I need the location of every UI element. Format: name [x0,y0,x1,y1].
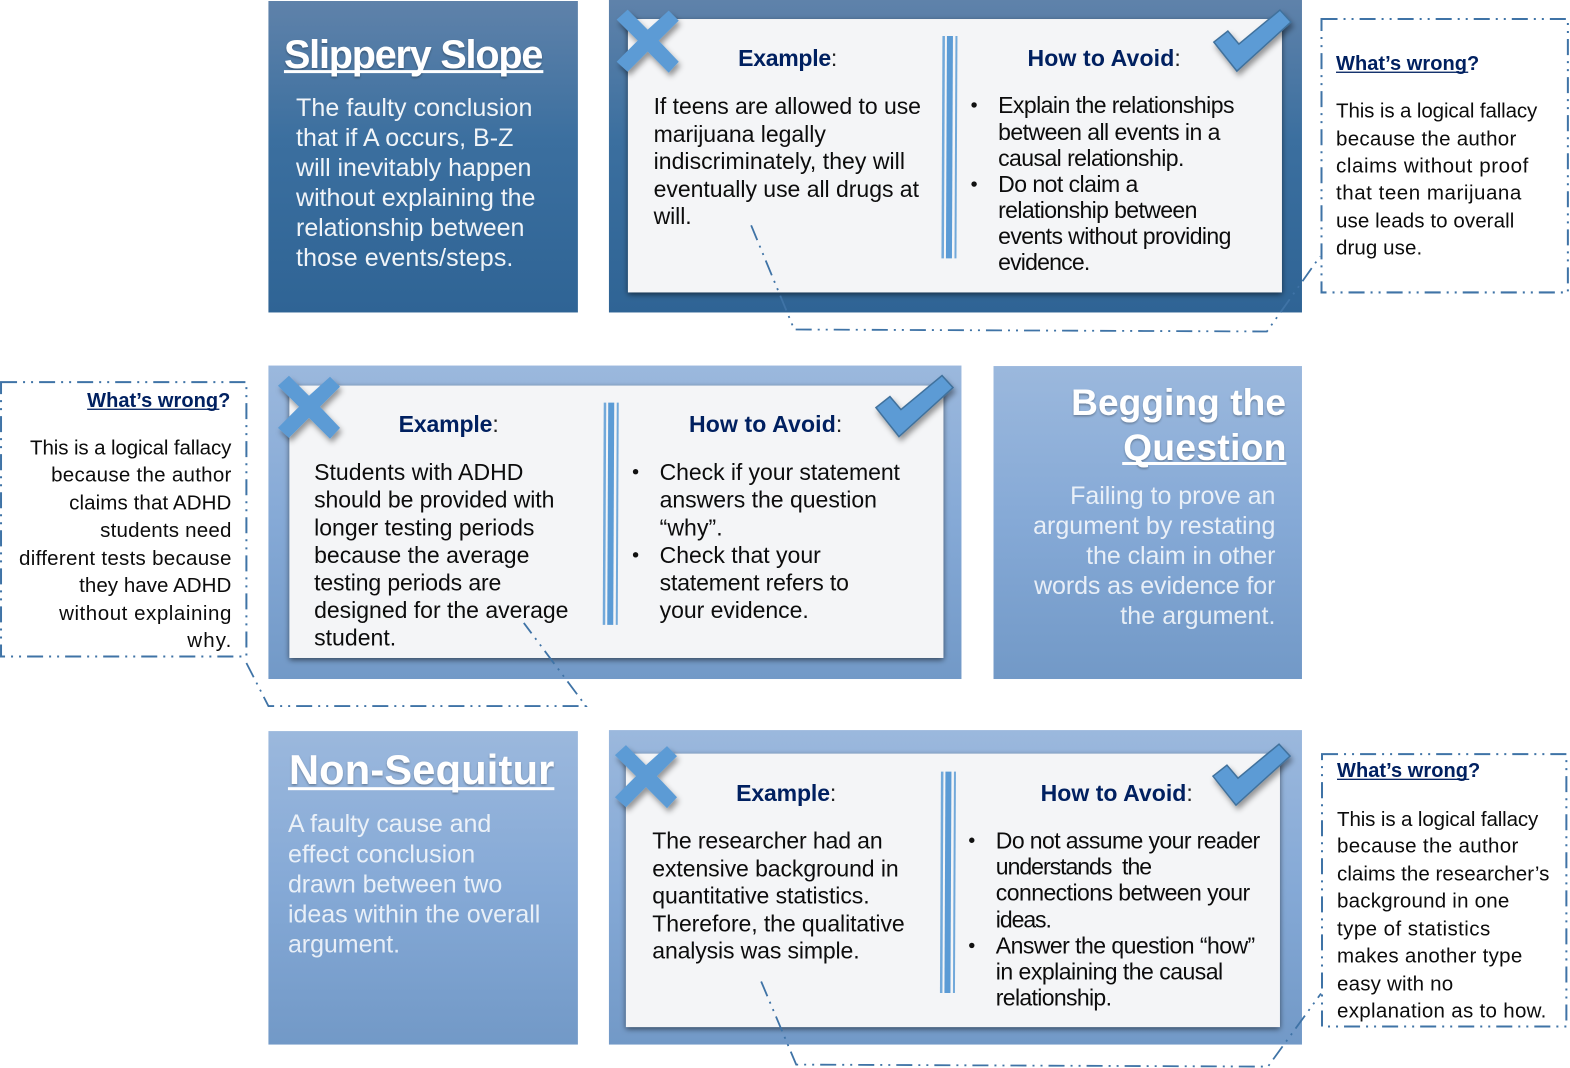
definition text: Non-Sequitur [288,810,540,958]
definition text: Begging the Question: argument by restating [1033,512,1275,540]
callout text: type of statistics [1337,917,1490,940]
how to avoid list: statement refers to [660,569,849,595]
example text [652,827,905,963]
definition text: Begging the Question: the claim in other [1086,542,1275,570]
callout text: that teen marijuana [1336,182,1522,205]
definition text: Non-Sequitur: argument. [288,930,400,958]
callout text: they have ADHD [79,574,231,597]
callout text [1336,99,1538,260]
callout heading: What’s wrong? [1337,760,1480,782]
heading: Slippery Slope: Slippery Slope [284,33,543,77]
definition text: Begging the Question [1033,482,1275,630]
how to avoid list: “why”. [660,514,723,540]
icon: cross mark [617,10,679,73]
how to avoid list: causal relationship. [998,145,1184,171]
divider: triple vertical bars [940,772,956,993]
heading: Example: Example: [738,45,837,71]
example text: extensive background in [652,855,899,881]
callout text: without explaining [58,602,231,625]
callout text: claims that ADHD [69,492,231,515]
callout connector line [246,623,586,706]
callout text: because the author [1337,834,1518,857]
example text: indiscriminately, they will [654,148,905,174]
example text [314,459,568,650]
how to avoid list: events without providing [998,223,1231,249]
example text: Students with ADHD [314,459,523,485]
how to avoid list: Answer the question “how” [996,932,1255,958]
how to avoid list [971,92,1234,275]
example text: because the average [314,542,529,568]
callout: What's wrong (Slippery Slope) [751,19,1568,331]
how to avoid list: understands the [996,853,1152,879]
callout text: explanation as to how. [1337,1000,1546,1023]
heading: How to Avoid: How to Avoid: [1028,45,1181,71]
card: Begging the Question [289,386,943,658]
example text: marijuana legally [654,121,826,147]
callout text: drug use. [1336,237,1422,260]
icon: check mark [1213,744,1290,805]
definition text: Slippery Slope: without explaining the [295,184,535,212]
definition text: Non-Sequitur: A faulty cause and [288,810,491,838]
divider: triple vertical bars [941,36,957,258]
panel: Begging the Question example and how to avoid [268,366,961,679]
definition text: Slippery Slope: will inevitably happen [295,154,531,182]
divider: triple vertical bars [603,403,619,625]
how to avoid list [633,459,901,623]
callout connector line [761,981,1321,1067]
example text: Therefore, the qualitative [652,910,905,936]
callout text: background in one [1337,889,1509,912]
example text: The researcher had an [652,827,883,853]
heading: How to Avoid: How to Avoid: [1041,780,1193,806]
heading: Begging the Question: Question [1123,426,1286,468]
panel: Non-Sequitur example and how to avoid [609,730,1302,1045]
example text: analysis was simple. [652,937,860,963]
callout text: students need [100,519,231,542]
callout text [1337,808,1549,1023]
definition text: Non-Sequitur: ideas within the overall [288,900,540,928]
example text: student. [314,624,396,650]
how to avoid list: answers the question [660,487,877,513]
definition text: Slippery Slope: relationship between [296,214,524,242]
callout text: why. [186,629,231,652]
how to avoid list: connections between your [996,879,1251,905]
panel: Non-Sequitur definition [268,731,578,1045]
callout text: because the author [1336,128,1516,151]
panel: Begging the Question definition [994,366,1302,679]
callout text: different tests because [19,547,231,570]
card: Non-Sequitur [626,754,1280,1027]
icon: check mark [876,376,953,437]
example text [653,93,921,229]
how to avoid list: Do not assume your reader [996,827,1261,853]
icon: cross mark [278,376,340,439]
heading: Begging the Question [1071,381,1286,468]
definition text: Non-Sequitur: effect conclusion [288,840,475,868]
how to avoid list: relationship. [996,985,1112,1011]
example text: longer testing periods [314,514,534,540]
how to avoid list: in explaining the causal [996,958,1223,984]
how to avoid list: relationship between [998,197,1197,223]
example text: quantitative statistics. [652,882,870,908]
how to avoid list: Check if your statement [660,459,901,485]
example text: If teens are allowed to use [654,93,921,119]
definition text: Slippery Slope: that if A occurs, B-Z [296,124,513,152]
how to avoid list: your evidence. [660,597,809,623]
heading: How to Avoid: How to Avoid: [689,411,842,437]
example text: designed for the average [314,597,568,623]
heading: Non-Sequitur: Non-Sequitur [289,746,554,793]
definition text: Slippery Slope [295,94,535,272]
icon: check mark [1214,10,1291,71]
definition text: Slippery Slope: The faulty conclusion [296,94,532,122]
panel: Slippery Slope example and how to avoid [609,0,1302,312]
panel: Slippery Slope definition [268,1,578,312]
definition text: Begging the Question: Failing to prove an [1070,482,1275,510]
how to avoid list: evidence. [998,249,1090,275]
callout text: because the author [51,464,232,487]
callout text: makes another type [1337,944,1522,967]
callout text: This is a logical fallacy [1337,808,1539,831]
definition text: Begging the Question: words as evidence for [1033,572,1275,600]
callout connector line [751,225,1320,331]
how to avoid list: Do not claim a [998,171,1139,197]
callout text: This is a logical fallacy [30,437,232,460]
callout heading: What’s wrong? [87,390,230,412]
callout: What's wrong (Non-Sequitur) [761,754,1566,1067]
callout text: claims the researcher’s [1337,862,1549,885]
example text: should be provided with [314,487,554,513]
how to avoid list: between all events in a [998,119,1221,145]
callout text: use leads to overall [1336,210,1514,233]
how to avoid list [969,827,1261,1011]
callout heading: What’s wrong? [1336,53,1479,75]
how to avoid list: Check that your [660,542,821,568]
how to avoid list: ideas. [996,906,1052,932]
definition text: Non-Sequitur: drawn between two [288,870,502,898]
callout text: claims without proof [1336,155,1529,178]
definition text: Begging the Question: the argument. [1120,602,1275,630]
icon: cross mark [615,745,677,808]
callout text: This is a logical fallacy [1336,99,1538,122]
example text: will. [653,203,692,229]
example text: testing periods are [314,569,501,595]
how to avoid list: Explain the relationships [998,92,1234,118]
card: Slippery Slope [628,19,1282,292]
heading: Example: Example: [399,411,499,437]
example text: eventually use all drugs at [654,176,920,202]
heading: Example: Example: [736,780,836,806]
callout text: easy with no [1337,972,1453,995]
callout text [19,437,232,652]
heading: Begging the Question: Begging the [1071,381,1286,423]
callout: What's wrong (Begging the Question) [1,382,586,706]
definition text: Slippery Slope: those events/steps. [296,244,513,272]
